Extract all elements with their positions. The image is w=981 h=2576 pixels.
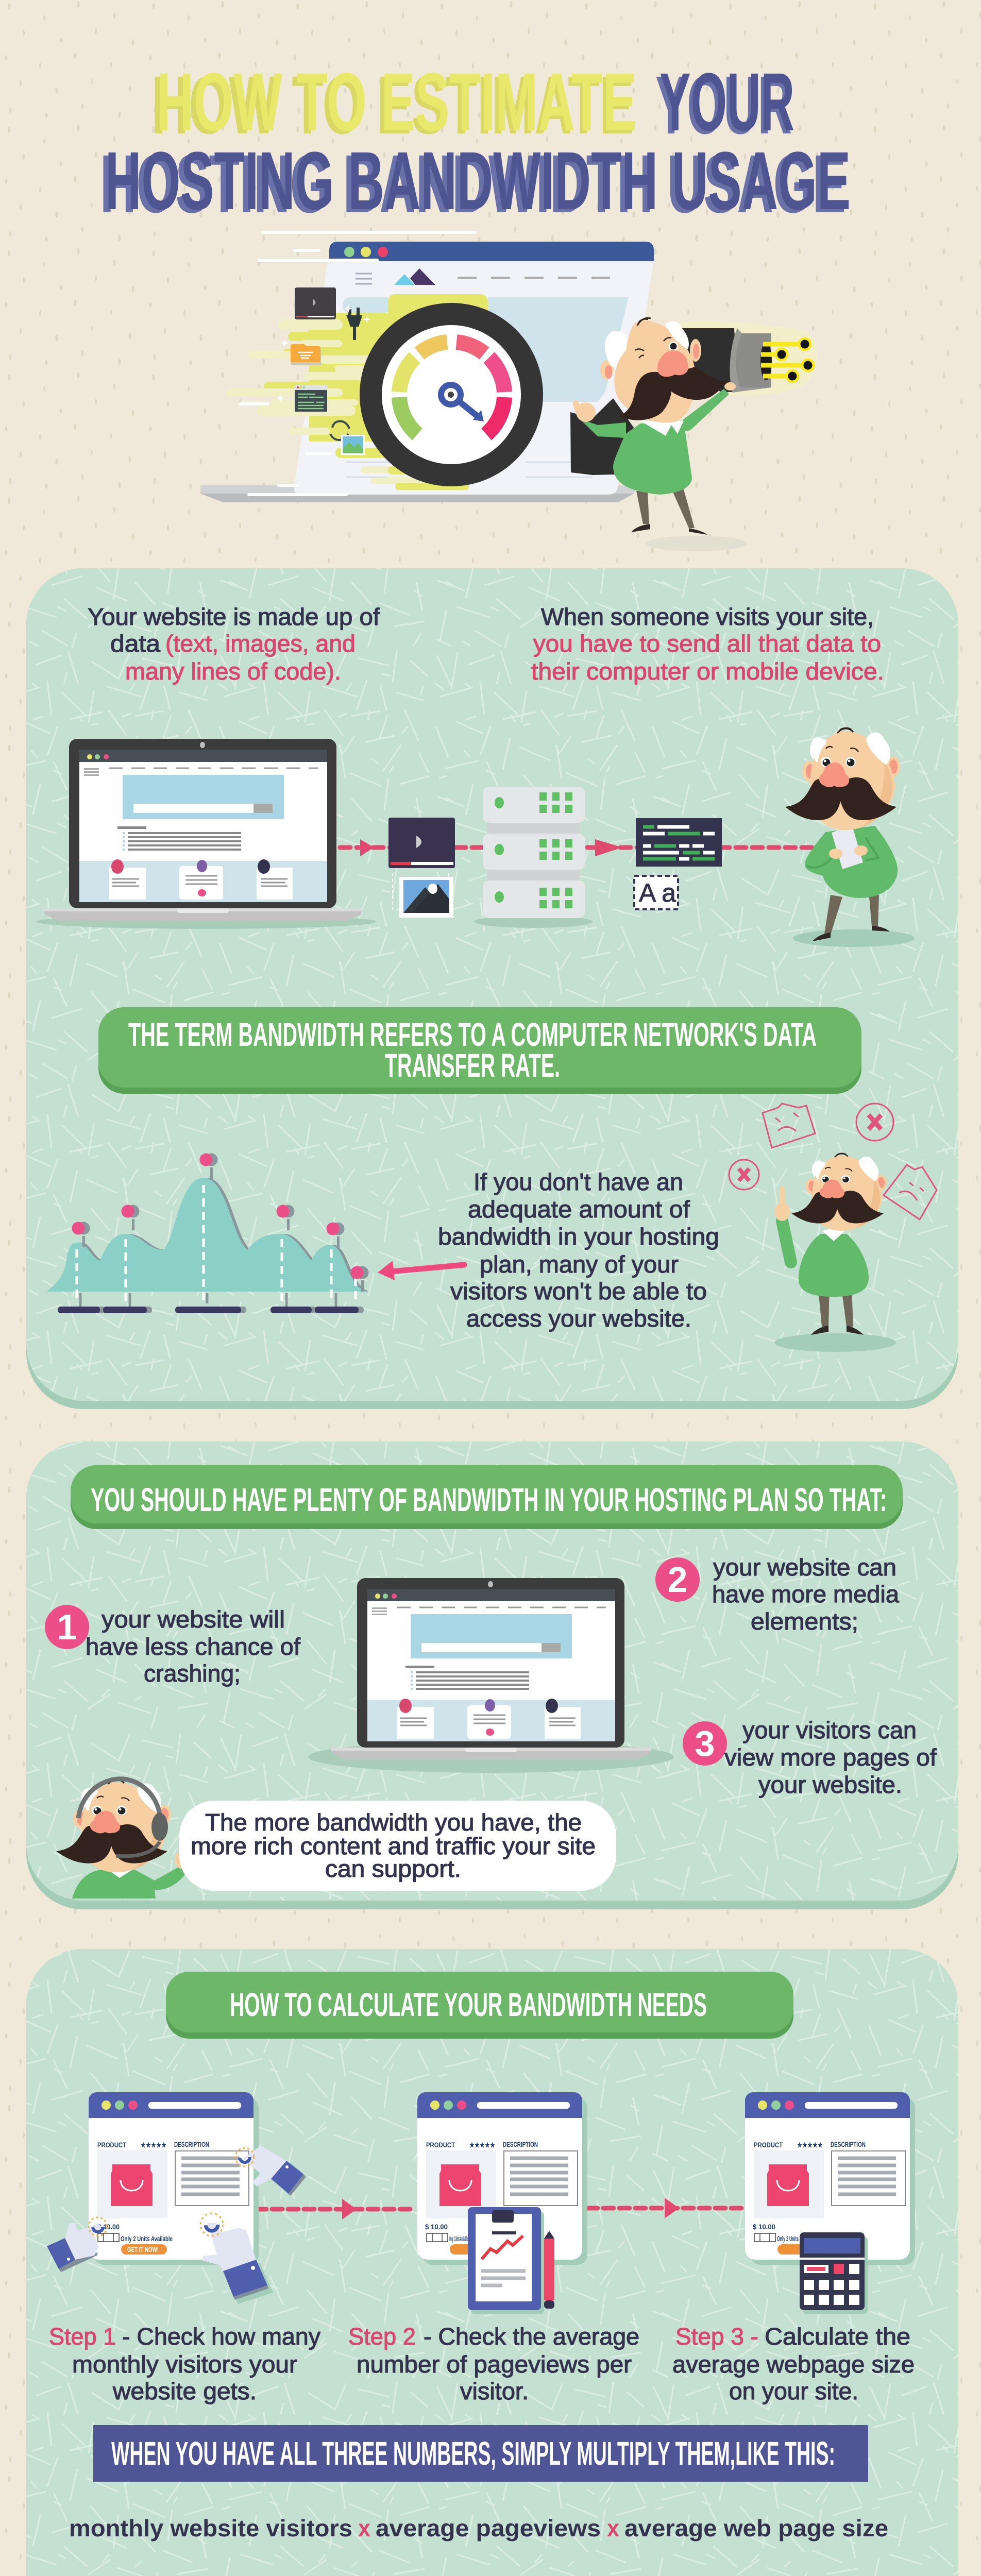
- hero illustration: browser window with speed gauge: [200, 231, 817, 551]
- mascot holding phone: [785, 728, 915, 947]
- step 3 text: average webpage size: [672, 2351, 915, 2378]
- step 1 text: Step 1: [49, 2323, 116, 2350]
- benefit 1: 1: [57, 1607, 77, 1647]
- step 3 text: on your site.: [729, 2378, 858, 2404]
- motion streaks: [226, 294, 488, 490]
- green heading: term bandwidth: [98, 1007, 861, 1094]
- traffic peaks chart: [47, 1153, 369, 1313]
- benefit 2: [655, 1554, 899, 1635]
- text: inadequate bandwidth: visitors won't be able to: [450, 1278, 707, 1304]
- step 1 text: monthly visitors your: [72, 2351, 297, 2378]
- benefit 2: elements;: [751, 1608, 858, 1635]
- step 3 browser card: Only 2 Units: [777, 2234, 799, 2243]
- step 1 browser card: ★★★★★: [141, 2141, 166, 2149]
- step 3 text: Step 3 -: [675, 2323, 758, 2350]
- step 2 browser card: [417, 2092, 587, 2265]
- formula: monthly website visitors: [69, 2515, 352, 2541]
- mascot pointing up: [774, 1154, 896, 1352]
- text: website data: data: [110, 630, 160, 657]
- step 3 browser card: DESCRIPTION: [831, 2140, 866, 2148]
- text: inadequate bandwidth: plan, many of your: [480, 1251, 679, 1278]
- text: website data: Your website is made up of: [88, 603, 380, 630]
- dashed data flow arrows: [340, 839, 834, 856]
- step 3 browser card: $ 10.00: [753, 2223, 775, 2231]
- benefit 3: your visitors can: [742, 1717, 917, 1743]
- benefit 3: view more pages of: [724, 1744, 937, 1771]
- formula: [69, 2515, 888, 2541]
- text: inadequate bandwidth: [438, 1168, 719, 1332]
- formula: average pageviews: [376, 2515, 601, 2541]
- speed gauge: [360, 303, 543, 486]
- speech bubble: more bandwidth: can support.: [325, 1855, 461, 1882]
- text: send data to visitors: you have to send all that data to: [533, 630, 881, 657]
- title: HOW TO ESTIMATE: [151, 59, 634, 151]
- step 1 browser card: DESCRIPTION: [174, 2140, 209, 2148]
- step 3 browser card: [745, 2092, 915, 2265]
- step 1 browser card: $ 10.00: [98, 2223, 120, 2231]
- step 3 text: [672, 2323, 915, 2404]
- panel 3: how to calculate bandwidth needs: [26, 1949, 958, 2576]
- benefit 1: your website will: [102, 1606, 285, 1633]
- green heading: plenty of bandwidth: [71, 1465, 903, 1529]
- panel 1: what bandwidth is: [26, 568, 958, 1409]
- step 2 browser card: ★★★★★: [469, 2141, 495, 2149]
- icon: refresh and image: [330, 421, 365, 455]
- step 2 text: - Check the average: [424, 2323, 639, 2350]
- icon: clipboard and pencil: [468, 2207, 554, 2314]
- text: website data: (text, images, and: [165, 630, 356, 657]
- speech bubble: more bandwidth: The more bandwidth you have, the: [205, 1809, 582, 1836]
- step 2 browser card: DESCRIPTION: [503, 2140, 538, 2148]
- formula: x: [607, 2515, 619, 2541]
- blue heading bar: multiply: [93, 2425, 868, 2482]
- green heading: term bandwidth: TRANSFER RATE.: [385, 1047, 560, 1084]
- step 2 text: number of pageviews per: [357, 2351, 632, 2378]
- benefit 1: [45, 1605, 300, 1687]
- text: inadequate bandwidth: access your website.: [466, 1305, 691, 1332]
- icon: clicking hands: [47, 2146, 307, 2304]
- icon: code panel: [295, 385, 327, 412]
- text: website data: many lines of code).: [125, 658, 341, 685]
- benefit 2: have more media: [712, 1581, 899, 1607]
- mascot plugging in cable: [572, 318, 747, 551]
- laptop showing website: [36, 739, 376, 929]
- text: website data: [88, 603, 380, 685]
- formula: x: [358, 2515, 370, 2541]
- icon: folder: [291, 344, 321, 365]
- mascot with headset: [56, 1779, 188, 1899]
- speech bubble: more bandwidth: more rich content and traffic your site: [191, 1833, 596, 1859]
- icon: picture: [393, 873, 453, 918]
- formula: average web page size: [624, 2515, 888, 2541]
- text: inadequate bandwidth: adequate amount of: [468, 1196, 690, 1223]
- step 2 text: Step 2: [348, 2323, 416, 2350]
- step 3 browser card: PRODUCT: [754, 2141, 783, 2149]
- benefit 2: your website can: [713, 1554, 897, 1581]
- step 1 browser card: Only 2 Units Available: [121, 2234, 173, 2243]
- text: send data to visitors: their computer or mobile device.: [531, 658, 884, 685]
- benefit 1: have less chance of: [86, 1633, 300, 1660]
- benefit 2: 2: [668, 1560, 687, 1600]
- text: send data to visitors: [531, 603, 884, 685]
- title: YOUR: [655, 59, 792, 151]
- laptop illustration: [308, 1578, 674, 1773]
- icon: video: [295, 287, 336, 319]
- text: inadequate bandwidth: bandwidth in your hosting: [438, 1223, 719, 1250]
- icon: video block: [388, 818, 455, 868]
- cable connector with yellow contacts: [680, 321, 817, 396]
- title: [100, 56, 851, 230]
- step 1 text: - Check how many: [122, 2323, 320, 2350]
- speech bubble: more bandwidth: [179, 1801, 616, 1891]
- step 2 browser card: PRODUCT: [426, 2141, 455, 2149]
- panel 2: benefits of plenty of bandwidth: [26, 1442, 958, 1909]
- icon: plug: [277, 304, 370, 402]
- icons: error folders and crosses: [729, 1104, 937, 1219]
- step 2 browser card: Only 2 Units Available: [449, 2234, 468, 2243]
- benefit 3: your website.: [758, 1771, 902, 1798]
- step 2 browser card: $ 10.00: [425, 2223, 448, 2231]
- step 1 text: website gets.: [112, 2378, 257, 2404]
- benefit 3: 3: [695, 1723, 715, 1764]
- step 3 text: Calculate the: [765, 2323, 910, 2350]
- green heading: calculate: [166, 1972, 793, 2039]
- benefit 1: crashing;: [144, 1660, 241, 1687]
- step 1 browser card: GET IT NOW!: [127, 2245, 159, 2253]
- top right hand: [235, 2146, 307, 2196]
- pink arrow to dropped visitor: [378, 1261, 464, 1280]
- icon: font sample: A a: [639, 878, 676, 907]
- bottom right hand: [200, 2213, 273, 2304]
- dashed arrows between steps: [256, 2198, 745, 2219]
- icon: code block: [636, 818, 722, 867]
- step 2 text: visitor.: [460, 2378, 529, 2404]
- left hand: [47, 2217, 107, 2272]
- icon: calculator: [800, 2232, 868, 2314]
- step 1 browser card: PRODUCT: [97, 2141, 126, 2149]
- title: YOUR: [659, 56, 794, 148]
- step 2 text: [348, 2323, 639, 2404]
- text: send data to visitors: When someone visits your site,: [541, 603, 874, 630]
- step 1 text: [49, 2323, 320, 2404]
- benefit 3: [683, 1717, 937, 1798]
- dark tube behind mascot: [570, 398, 634, 475]
- step 3 browser card: ★★★★★: [797, 2141, 823, 2149]
- step 1 browser card: [89, 2092, 259, 2265]
- text: inadequate bandwidth: If you don't have an: [473, 1168, 683, 1195]
- server stack: [474, 787, 593, 928]
- title: HOW TO ESTIMATE: [157, 56, 637, 148]
